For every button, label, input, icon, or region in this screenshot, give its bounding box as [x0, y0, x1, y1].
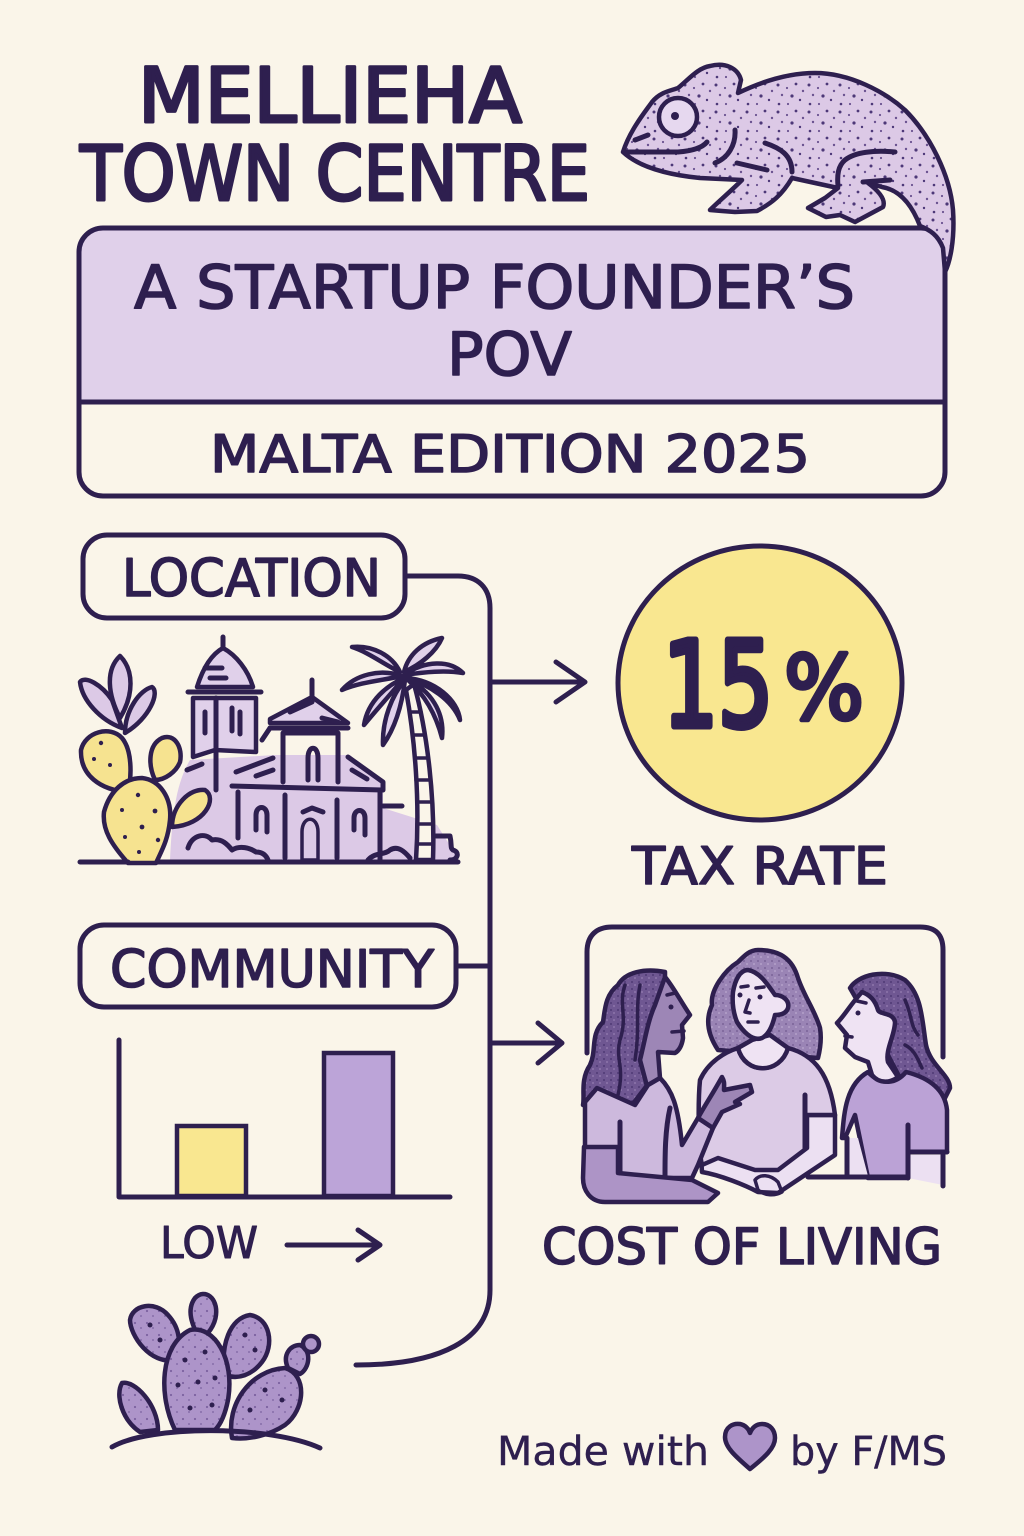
title: MELLIEHA: [138, 51, 522, 140]
illustration: prickly pear cactus: [112, 1294, 320, 1448]
title: TOWN CENTRE: [79, 129, 590, 218]
church roofs: [232, 728, 383, 790]
arrow: to cost of living: [492, 1023, 562, 1063]
credit line: Made with: [497, 1429, 709, 1475]
title: [79, 51, 590, 218]
chart label: low: [160, 1218, 380, 1269]
label: community: [80, 925, 456, 1007]
arrow: to tax rate: [492, 662, 585, 702]
illustration: three people talking: [583, 927, 950, 1202]
church upper: [270, 697, 348, 723]
label: tax rate: TAX RATE: [631, 837, 888, 897]
middle person: [699, 950, 835, 1195]
right person: [808, 974, 950, 1186]
door: [302, 819, 318, 860]
eye: [659, 98, 697, 136]
left person: [583, 971, 752, 1202]
label: location: [83, 535, 405, 618]
panel: subtitle banner: A STARTUP FOUNDER’S: [134, 253, 855, 323]
credit line: by F/MS: [790, 1429, 947, 1475]
chart label: low: LOW: [160, 1218, 258, 1269]
label: community: COMMUNITY: [110, 940, 434, 1000]
hill fill: [170, 755, 458, 860]
label: location: LOCATION: [122, 549, 381, 609]
leaves: [110, 656, 130, 718]
bar chart: [119, 1040, 450, 1197]
tax rate badge: %: [784, 637, 864, 740]
prickly pads: [81, 731, 130, 792]
ground: [80, 860, 458, 864]
church walls: [238, 792, 402, 860]
bar: high: [324, 1053, 393, 1196]
panel: subtitle banner: [79, 228, 945, 496]
icon: chameleon: [623, 65, 953, 272]
frame: [587, 927, 943, 1057]
icon: heart: [725, 1424, 775, 1469]
connector lines: [356, 576, 490, 1365]
bar: low: [177, 1126, 246, 1196]
shrubs: [188, 836, 457, 860]
panel: subtitle banner: POV: [447, 320, 572, 390]
label: cost of living: COST OF LIVING: [542, 1218, 942, 1276]
tax rate badge: 15: [663, 616, 773, 754]
palm fronds: [342, 638, 463, 745]
palm trunk: [406, 684, 433, 860]
tower: [193, 698, 256, 757]
illustration: church, cactus and palm: [80, 637, 463, 863]
tax rate badge: [618, 546, 902, 820]
credit line: [497, 1424, 947, 1475]
panel: subtitle banner: MALTA EDITION 2025: [210, 425, 810, 485]
